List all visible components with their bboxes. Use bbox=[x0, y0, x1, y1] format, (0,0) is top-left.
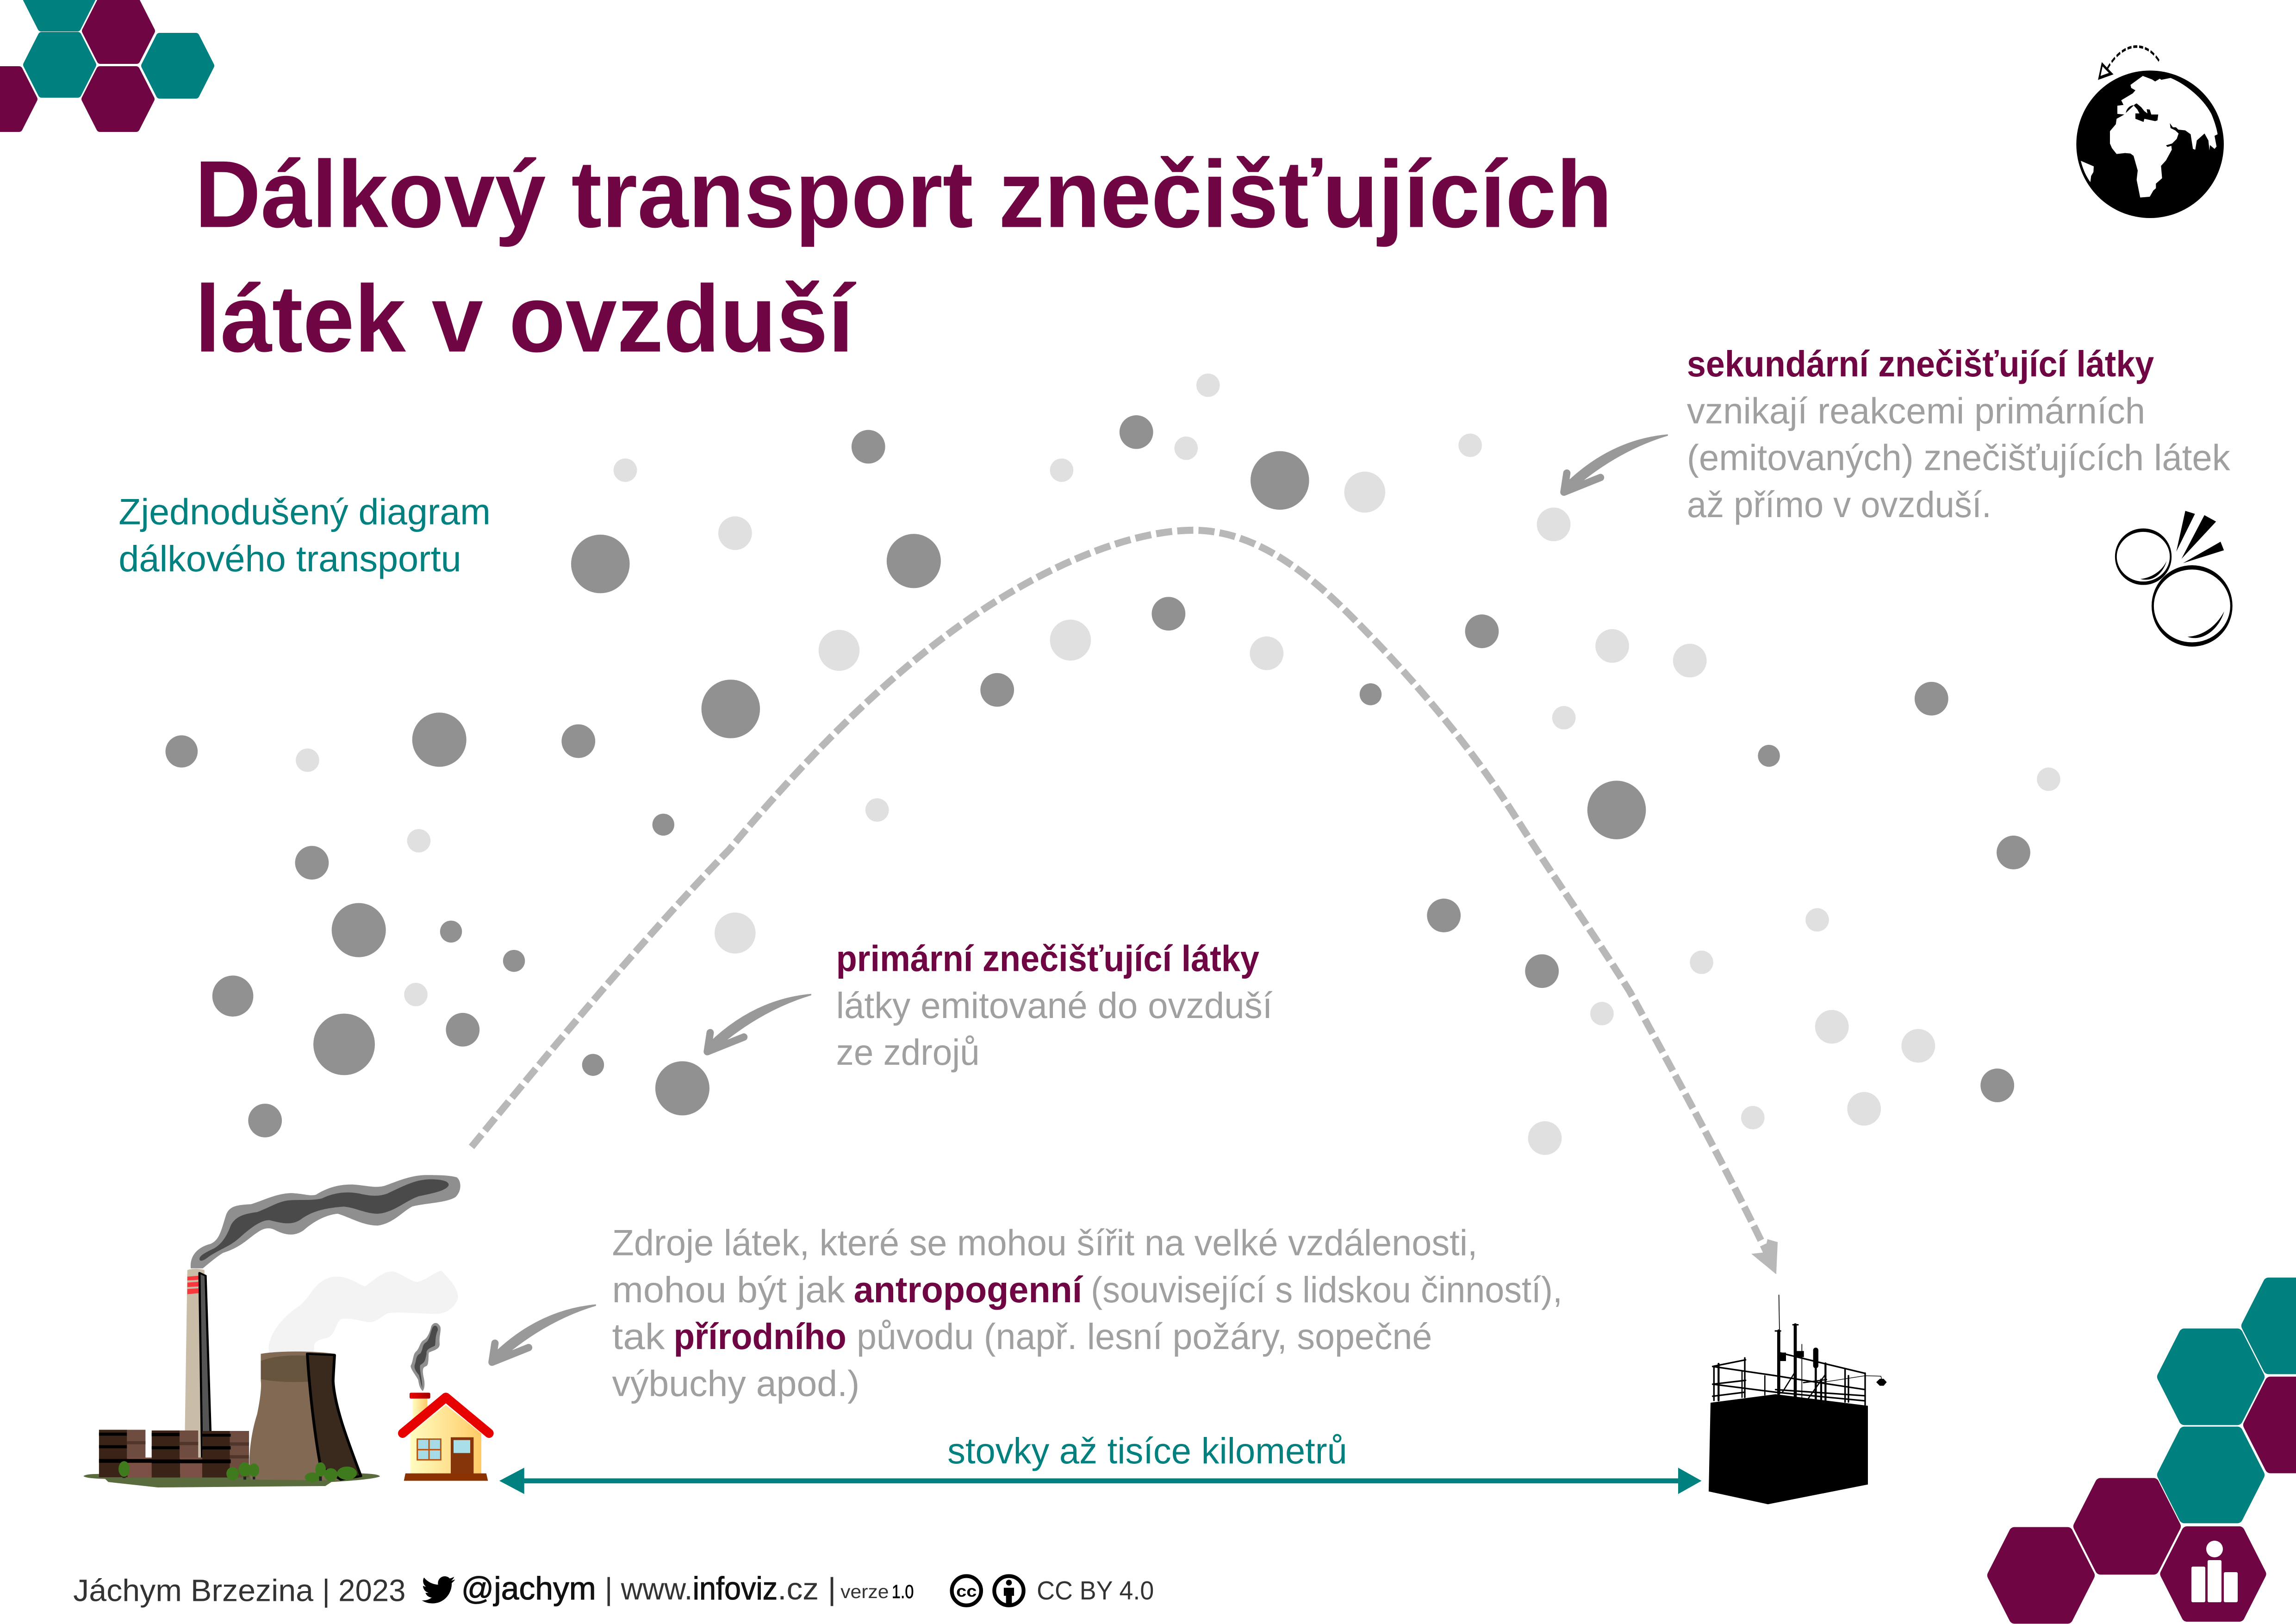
website: infoviz bbox=[693, 1570, 778, 1606]
chart area in reference-thumbnail units bbox=[118, 141, 2230, 1494]
icon: by license bbox=[994, 1576, 1024, 1605]
text: secondary pollutants bbox=[1687, 343, 2230, 525]
hexagon cluster: bottom right bbox=[1993, 1283, 2296, 1618]
chimney bbox=[184, 1269, 211, 1473]
arrow: to house and factory bbox=[492, 1305, 596, 1362]
icon: cc license: cc bbox=[956, 1582, 977, 1600]
icon: globe with rotation arrow bbox=[2076, 47, 2224, 218]
text: sources: (související s lidskou činností), bbox=[1091, 1269, 1562, 1310]
hexagon cluster: top left bbox=[0, 0, 211, 128]
text: secondary pollutants: (emitovaných) znečišťujících látek bbox=[1687, 437, 2230, 478]
subtitle: Zjednodušený diagram bbox=[118, 491, 491, 532]
text: primary pollutants: ze zdrojů bbox=[836, 1031, 980, 1073]
text: sources: původu (např. lesní požáry, sopečné bbox=[857, 1316, 1432, 1357]
text: sources: přírodního bbox=[673, 1316, 846, 1357]
buildings bbox=[99, 1430, 249, 1478]
website bbox=[605, 1570, 836, 1606]
particles: primary (dark) bbox=[166, 415, 2030, 1137]
icon: infoviz logo bbox=[2191, 1541, 2238, 1602]
icon: twitter bird bbox=[422, 1576, 455, 1604]
text: secondary pollutants: až přímo v ovzduší. bbox=[1687, 484, 1991, 525]
text: sources bbox=[612, 1222, 1562, 1404]
author: Jáchym Brzezina bbox=[73, 1574, 313, 1608]
license text: CC BY 4.0 bbox=[1037, 1576, 1154, 1605]
white steam bbox=[268, 1271, 458, 1354]
subtitle: dálkového transportu bbox=[118, 538, 461, 579]
website: | www. bbox=[605, 1572, 693, 1606]
icon: power plant bbox=[83, 1175, 460, 1487]
text: primary pollutants: primární znečišťující látky bbox=[836, 938, 1259, 979]
icon: measuring station bbox=[1709, 1295, 1887, 1504]
text: sources: výbuchy apod.) bbox=[612, 1362, 859, 1404]
arrow: dashed transport arc bbox=[472, 530, 1778, 1274]
version bbox=[840, 1581, 914, 1602]
footer separator and year: | 2023 bbox=[322, 1574, 405, 1608]
icon: colliding particles bbox=[2116, 511, 2231, 644]
title: látek v ovzduší bbox=[195, 265, 856, 372]
footer bbox=[73, 1570, 1154, 1608]
title: Dálkový transport znečišťujících bbox=[195, 141, 1612, 247]
website: .cz | bbox=[778, 1572, 836, 1606]
version: verze bbox=[840, 1581, 889, 1602]
icon: cc license bbox=[952, 1576, 981, 1605]
text: sources: tak bbox=[612, 1316, 665, 1357]
arrow: distance bbox=[499, 1468, 1702, 1494]
title bbox=[195, 141, 1612, 372]
text: primary pollutants: látky emitované do ovzduší bbox=[836, 985, 1273, 1026]
trees bbox=[118, 1461, 357, 1482]
house smoke bbox=[411, 1323, 441, 1391]
twitter handle: @jachym bbox=[461, 1570, 596, 1606]
particles: secondary (light) bbox=[296, 374, 2060, 1155]
chimney smoke bbox=[191, 1175, 460, 1268]
version: 1.0 bbox=[892, 1581, 914, 1602]
arrow: to primary particle bbox=[707, 994, 811, 1052]
cooling tower bbox=[249, 1351, 361, 1480]
text: secondary pollutants: sekundární znečišťující látky bbox=[1687, 343, 2154, 384]
subtitle bbox=[118, 491, 491, 579]
icon: house bbox=[403, 1323, 489, 1481]
text: sources: antropogenní bbox=[854, 1269, 1083, 1310]
ground bbox=[83, 1473, 380, 1487]
text: sources: mohou být jak bbox=[612, 1269, 845, 1310]
text: secondary pollutants: vznikají reakcemi primárních bbox=[1687, 390, 2145, 431]
arrow: to secondary particle bbox=[1564, 434, 1668, 492]
label: distance: stovky až tisíce kilometrů bbox=[947, 1430, 1347, 1471]
text: sources: Zdroje látek, které se mohou šířit na velké vzdálenosti, bbox=[612, 1222, 1477, 1263]
text: primary pollutants bbox=[836, 938, 1273, 1073]
